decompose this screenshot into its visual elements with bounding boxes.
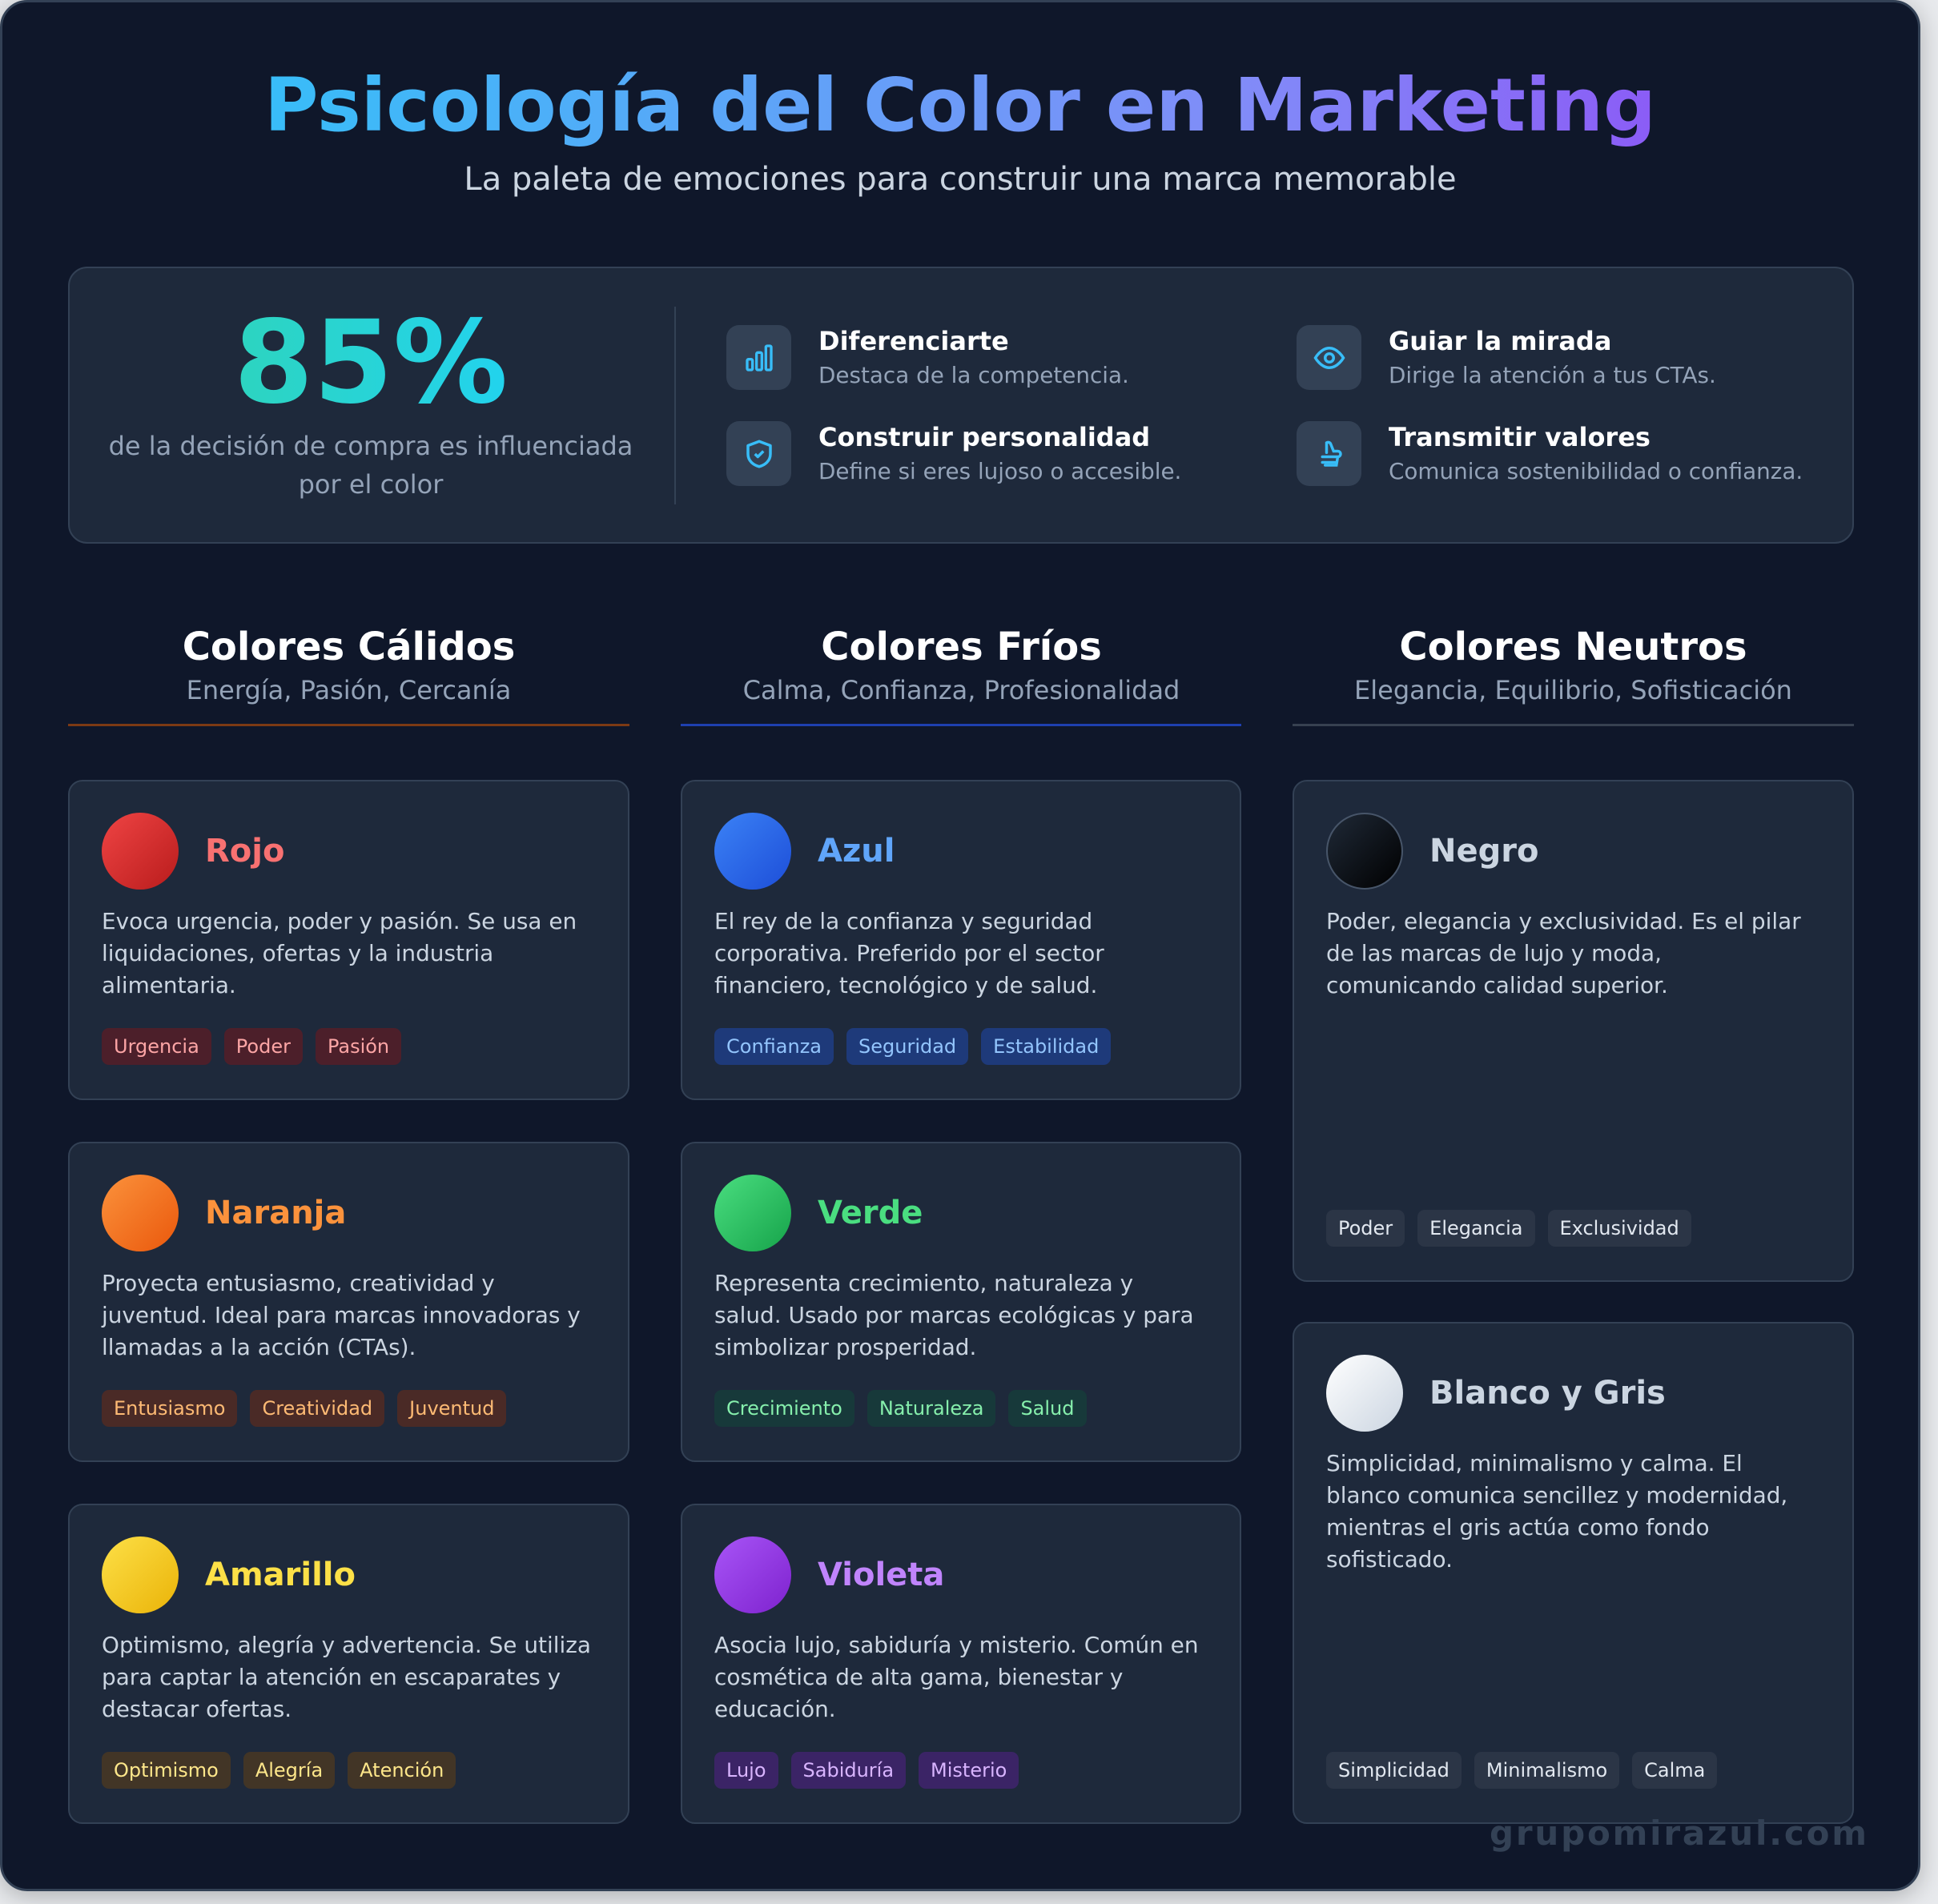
card: Amarillo: Alegría (255, 1759, 323, 1781)
benefit: Construir personalidad: Define si eres lujoso o accesible. (818, 458, 1181, 484)
heading: Colores Neutros: Colores Neutros (1399, 625, 1747, 669)
heading: Colores Fríos (743, 625, 1180, 705)
heading: Colores Cálidos (183, 625, 515, 705)
icon: shield (726, 421, 791, 486)
card: Negro: Poder (1338, 1217, 1393, 1239)
card: Azul: Azul (818, 833, 895, 870)
card: Amarillo (68, 1504, 629, 1824)
benefit: Diferenciarte (726, 325, 1129, 390)
card: Naranja (68, 1142, 629, 1462)
card: Amarillo: Optimismo (114, 1759, 219, 1781)
card: Negro: Elegancia (1429, 1217, 1523, 1239)
heading: Colores Cálidos: Energía, Pasión, Cercanía (187, 675, 511, 705)
card: Verde: Naturaleza (879, 1397, 983, 1420)
card: Violeta: Sabiduría (803, 1759, 894, 1781)
card: Azul: Estabilidad (993, 1035, 1099, 1058)
card: Violeta: Violeta (818, 1557, 944, 1593)
icon: bar chart (726, 325, 791, 390)
icon: eye (1297, 325, 1361, 390)
benefit: Construir personalidad (726, 421, 1181, 486)
card: Azul: Seguridad (858, 1035, 956, 1058)
card: Verde: Salud (1020, 1397, 1075, 1420)
benefit: Transmitir valores (1297, 421, 1803, 486)
card: Amarillo: Amarillo (205, 1557, 356, 1593)
card: Blanco y Gris: Calma (1644, 1759, 1705, 1781)
icon: hand (1297, 421, 1361, 486)
heading: Colores Fríos: Colores Fríos (821, 625, 1102, 669)
card: Negro (1293, 780, 1854, 1282)
benefit: Guiar la mirada: Dirige la atención a tus CTAs. (1389, 362, 1716, 388)
card: Violeta: Asocia lujo, sabiduría y misterio. Común en cosmética de alta gama, bienestar y educación. (714, 1632, 1199, 1722)
card: Verde: salud. Usado por marcas ecológicas y para simbolizar prosperidad. (714, 1302, 1194, 1360)
card: Rojo: Poder (236, 1035, 291, 1058)
heading: Colores Neutros (1354, 625, 1792, 705)
card: Verde: Representa crecimiento, naturaleza y (714, 1270, 1133, 1296)
card: Naranja: Juventud (409, 1397, 494, 1420)
card: Verde: Crecimiento (726, 1397, 842, 1420)
card: Rojo: Urgencia (114, 1035, 199, 1058)
card: Negro: Negro (1429, 833, 1538, 870)
card: Violeta (681, 1504, 1241, 1824)
card: Blanco y Gris: Blanco y Gris (1429, 1374, 1666, 1411)
benefit: Guiar la mirada (1297, 325, 1716, 390)
card: Violeta: Lujo (726, 1759, 766, 1781)
card: Azul: El rey de la confianza y seguridad corporativa. Preferido por el sector financiero, tecnológico y de salud. (714, 908, 1104, 998)
card: Naranja: Entusiasmo (114, 1397, 225, 1420)
card: Rojo: Rojo (205, 833, 284, 870)
card: Violeta: Misterio (931, 1759, 1007, 1781)
card: Rojo: Evoca urgencia, poder y pasión. Se usa en liquidaciones, ofertas y la industria alimentaria. (102, 908, 577, 998)
heading: Colores Cálidos: Colores Cálidos (183, 625, 515, 669)
heading: Colores Fríos: Calma, Confianza, Profesionalidad (743, 675, 1180, 705)
benefit: Diferenciarte: Destaca de la competencia. (818, 362, 1129, 388)
watermark: grupomirazul.com (1490, 1814, 1869, 1853)
card: Amarillo: Optimismo, alegría y advertencia. Se utiliza para captar la atención en escaparates y destacar ofertas. (102, 1632, 591, 1722)
benefit: Guiar la mirada: Guiar la mirada (1389, 326, 1611, 356)
card: Blanco y Gris (1293, 1322, 1854, 1824)
card: Blanco y Gris: Simplicidad (1338, 1759, 1449, 1781)
card: Verde (681, 1142, 1241, 1462)
card: Amarillo: Atención (360, 1759, 444, 1781)
card: Naranja: Naranja (205, 1195, 346, 1231)
stat caption: de la decisión de compra es influenciada por el color (109, 431, 633, 500)
card: Negro: Exclusividad (1560, 1217, 1679, 1239)
card: Rojo: Pasión (328, 1035, 389, 1058)
card: Negro: Poder, elegancia y exclusividad. Es el pilar de las marcas de lujo y moda, (1326, 908, 1801, 966)
panel: stats (68, 267, 1854, 544)
heading: Colores Neutros: Elegancia, Equilibrio, Sofisticación (1354, 675, 1792, 705)
card: Blanco y Gris: Simplicidad, minimalismo y calma. El blanco comunica sencillez y modernidad, mientras el gris actúa como fondo sofisticado. (1326, 1450, 1787, 1573)
benefit: Transmitir valores: Transmitir valores (1389, 422, 1651, 452)
benefit: Diferenciarte: Diferenciarte (818, 326, 1009, 356)
card: Azul (681, 780, 1241, 1100)
title: Psicología del Color en Marketing (264, 62, 1656, 148)
card: Rojo (68, 780, 629, 1100)
subtitle: La paleta de emociones para construir una marca memorable (464, 161, 1457, 198)
card: Azul: Confianza (726, 1035, 822, 1058)
stat: 85%: 85% (234, 295, 508, 429)
benefit: Construir personalidad: Construir personalidad (818, 422, 1150, 452)
card: Negro: comunicando calidad superior. (1326, 972, 1668, 998)
card: Naranja: Creatividad (262, 1397, 372, 1420)
card: Verde: Verde (818, 1195, 923, 1231)
card: Naranja: Proyecta entusiasmo, creatividad y juventud. Ideal para marcas innovadoras y llamadas a la acción (CTAs). (102, 1270, 581, 1360)
benefit: Transmitir valores: Comunica sostenibilidad o confianza. (1389, 458, 1803, 484)
card: Blanco y Gris: Minimalismo (1486, 1759, 1607, 1781)
